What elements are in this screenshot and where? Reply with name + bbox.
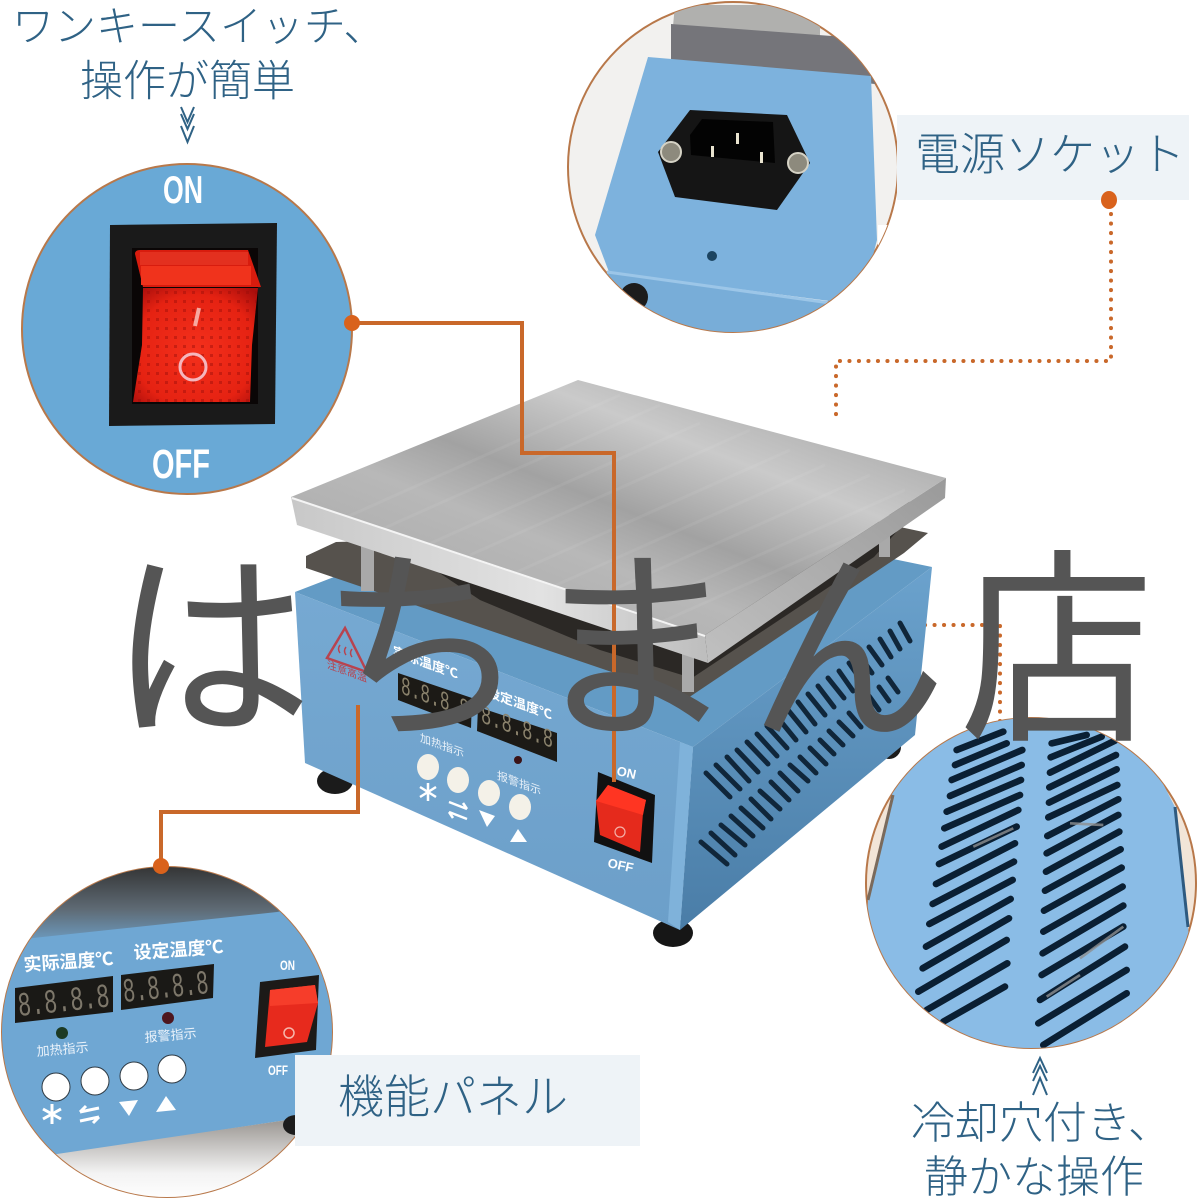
ON text: ON: [163, 169, 203, 212]
small hole: [707, 251, 717, 261]
white notch: [878, 225, 888, 246]
display: actual temperature: 8.8.8.8: [401, 673, 469, 727]
plate brushed streaks: [340, 395, 935, 625]
O mark: [180, 354, 206, 380]
OFF text: OFF: [152, 441, 210, 487]
rubber foot: [622, 283, 648, 306]
circle background: [22, 164, 352, 494]
circle background: [2, 867, 332, 1197]
foot: [283, 1115, 295, 1135]
panel scene: [0, 865, 340, 1200]
body top surface: [295, 490, 932, 747]
switch frame: [109, 223, 277, 426]
blue rear panel: [595, 57, 877, 305]
heating label: 加热指示: [36, 1040, 89, 1059]
actual temperature label: 实际温度℃: [23, 948, 114, 975]
heating LED: [56, 1027, 68, 1039]
panel: function panel close-up: [0, 865, 340, 1200]
display 2: 8.8.8.8: [121, 966, 211, 1013]
I mark: [195, 308, 199, 326]
rocker switch frame: [594, 772, 655, 863]
connector dot: function panel: [153, 858, 169, 874]
buttons: [417, 754, 531, 820]
under shadow: [56, 1120, 295, 1197]
body front face: [295, 592, 693, 930]
screw right: [788, 153, 808, 173]
solid connector: function panel: [161, 705, 358, 866]
solid connector: switch: [352, 323, 614, 782]
alarm LED: [514, 756, 522, 764]
support pillars: [361, 515, 890, 692]
socket recess: [690, 119, 775, 163]
switch frame: [255, 975, 319, 1058]
ON label: ON: [615, 763, 638, 782]
rocker switch: [596, 785, 646, 852]
warning triangle icon: 注意高温: [327, 658, 367, 685]
panel: cooling vents close-up: [860, 700, 1199, 1060]
steel plate top: [291, 380, 946, 635]
OFF text: OFF: [268, 1062, 288, 1078]
warning triangle icon: [327, 628, 367, 685]
button symbols: [43, 1096, 176, 1124]
alarm label: 报警指示: [497, 768, 541, 798]
switch rocker: [265, 985, 318, 1047]
watermark: はちまん店: [106, 540, 1166, 752]
arrow: double chevron down: [181, 107, 194, 142]
caption: cooling holes: 冷却穴付き、: [911, 1099, 1172, 1148]
OFF label: OFF: [606, 855, 635, 875]
socket body: [658, 110, 810, 210]
display 2: [121, 964, 214, 1013]
metal top strip: [673, 5, 820, 36]
arrow: double chevron up: [1033, 1058, 1047, 1095]
display 1: 8.8.8.8: [16, 980, 112, 1027]
label: function panel: [295, 1055, 640, 1146]
body right face: [680, 567, 932, 930]
steel plate left edge: [291, 497, 708, 663]
dotted connector: power socket: [836, 214, 1111, 418]
ON text: ON: [280, 957, 295, 973]
heating plate machine: [291, 380, 946, 947]
button symbols: [420, 783, 527, 842]
plate highlight: [292, 498, 705, 636]
display: actual temperature: [398, 673, 472, 728]
label: power socket: [897, 115, 1189, 200]
display: set temperature: [477, 702, 557, 762]
heading: one-key switch: ワンキースイッチ、: [12, 3, 385, 50]
vent glints: [973, 823, 1123, 997]
blue side panel: [868, 719, 1188, 1048]
circle outline: [568, 2, 898, 332]
vent scene: [866, 719, 1190, 1048]
label: function panel: 機能パネル: [338, 1071, 568, 1123]
front label: actual temperature: 実际温度℃: [393, 644, 459, 682]
alarm LED: [162, 1012, 174, 1024]
display 1: [15, 976, 113, 1027]
vent slots: [918, 732, 1127, 1045]
panel: power socket close-up: [568, 2, 900, 345]
socket scene: [595, 5, 900, 345]
heading: easy to operate: 操作が簡単: [80, 58, 295, 106]
metal plate: [671, 24, 885, 85]
steel plate right edge: [705, 478, 946, 663]
label: power socket: 電源ソケット: [915, 129, 1185, 180]
front label: set temperature: 設定温度℃: [487, 685, 553, 723]
circle background: [866, 718, 1196, 1048]
left shadow: [868, 795, 893, 900]
front corner strip: [668, 742, 693, 930]
side vents: [701, 623, 910, 864]
face: [2, 912, 332, 1155]
dotted connector: cooling vents: [925, 625, 1000, 722]
set temperature label: 设定温度℃: [133, 937, 224, 963]
heating label: 加热指示: [420, 731, 464, 760]
blue lower fold: [606, 271, 828, 332]
foot: left: [317, 768, 353, 794]
foot: right: [877, 735, 901, 759]
panel: rocker switch close-up: [22, 164, 352, 494]
pins: [711, 133, 763, 163]
alarm label: 报警指示: [144, 1026, 197, 1045]
dark gap under plate: [420, 500, 925, 678]
buttons: [42, 1055, 186, 1101]
connector dot: power socket: [1101, 191, 1117, 209]
right edge: [1175, 807, 1188, 927]
fold line: [607, 272, 830, 303]
rocker lens: [133, 250, 261, 402]
screw left: [661, 142, 681, 162]
lower plate: [306, 527, 928, 698]
switch cavity: [132, 248, 258, 404]
top surface: [27, 867, 307, 945]
foot: front: [653, 919, 693, 947]
connector dot: switch: [344, 315, 360, 331]
display: set temperature: 8.8.8.8: [481, 702, 553, 757]
